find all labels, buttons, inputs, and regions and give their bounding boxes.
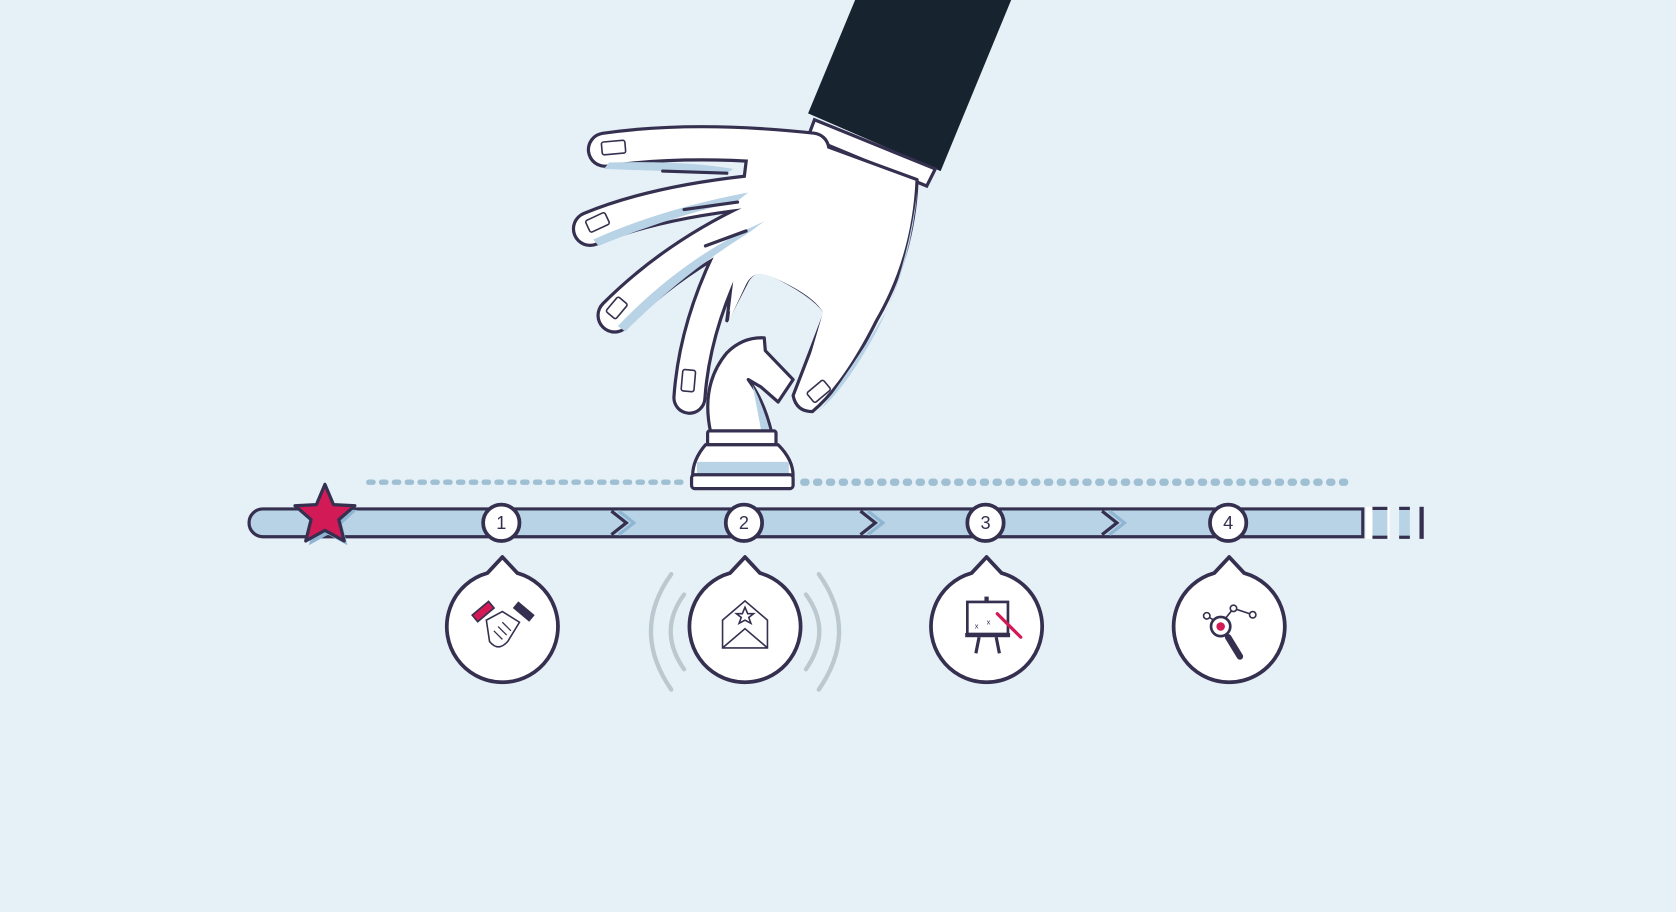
hand xyxy=(585,140,917,412)
finger shading xyxy=(604,162,733,173)
step 1 icon: handshake xyxy=(447,557,558,682)
start star xyxy=(295,484,357,545)
step 3 icon: easel with strategy board: x xyxy=(975,622,979,631)
sleeve xyxy=(808,0,1011,186)
step number circles xyxy=(483,505,1246,541)
dotted line xyxy=(369,480,1347,485)
step 3 icon: easel with strategy board: x xyxy=(987,617,991,626)
step number circles: 2 xyxy=(739,513,749,533)
step number circles: 4 xyxy=(1223,513,1233,533)
bar end dashes xyxy=(1366,507,1424,539)
step number circles: 1 xyxy=(496,513,506,533)
signal waves around step 2 xyxy=(651,574,839,690)
step 3 icon: easel with strategy board xyxy=(931,557,1042,682)
step 2 icon: envelope with star xyxy=(689,557,801,682)
step 4 icon: magnifier analytics xyxy=(1174,557,1285,682)
step number circles: 3 xyxy=(980,513,991,533)
dark outline layer xyxy=(590,143,812,398)
timeline bar xyxy=(249,507,1424,539)
finger crease lines xyxy=(663,171,727,173)
nails xyxy=(585,140,831,403)
knight chess piece xyxy=(692,338,793,489)
